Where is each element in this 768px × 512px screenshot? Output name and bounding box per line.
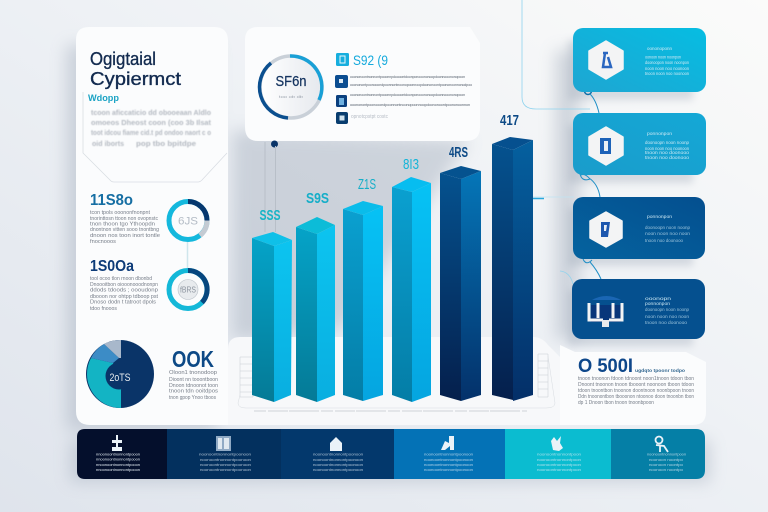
intro text: pop tbo bpitdpe	[136, 141, 196, 148]
summary heading	[336, 52, 388, 68]
stat: third: OOK	[172, 346, 214, 372]
band text: noonoon noontpo	[649, 463, 683, 467]
donut: first: 6JS	[178, 216, 198, 228]
axis tick	[533, 198, 544, 200]
list item 3	[336, 112, 388, 124]
stat: first: fnocnooos	[90, 239, 117, 245]
panel: lower right note: O 500I	[578, 356, 633, 377]
card 3: doonoopn noon noonp	[645, 225, 690, 230]
card 4: ponnonpon	[645, 301, 671, 306]
band text: nnoonoontnonnontpooon	[96, 468, 140, 472]
summary heading: S92 (9	[353, 52, 388, 68]
stat: second	[90, 258, 159, 312]
stat: first: 11S8o	[90, 192, 133, 209]
card 2: noon noon noo noonoon	[645, 146, 689, 151]
bar 6	[492, 137, 533, 401]
band text: noonoontnonnontpoonoon	[200, 463, 251, 467]
stat: second: tdoo fnooos	[90, 306, 118, 312]
stat: third: tnoon tdn ooitdpos	[169, 388, 219, 394]
chart grid base	[238, 354, 555, 411]
stat: second: ddods tdoods ; oooudonp	[90, 288, 158, 294]
band text: noonoontnonnontpoonoon	[424, 452, 473, 456]
band text: noonoontnonnontpoonoon	[424, 468, 473, 472]
bar 1	[252, 232, 292, 402]
donut: first	[169, 202, 207, 240]
stat: first: dnoon nos toon inort tontle	[90, 233, 160, 239]
bar value labels: 8I3	[403, 156, 419, 173]
card 1: oonoon noon noonpon	[645, 54, 681, 60]
list item 2: ooononontpoonooondpoonnontnoonopoonnoopdoononoontpoononoonnon	[350, 103, 470, 107]
bar value labels: S9S	[306, 190, 329, 207]
intro text	[91, 110, 212, 148]
card 4: noon noon noo noon	[645, 314, 690, 319]
panel: lower right note: Ddn tnoonontbon tbooonon ntoonoo doon tnoonbn tbon	[578, 394, 694, 400]
stat: second: tool ocoo tlon rnoon dbonbd	[90, 276, 152, 282]
title: Cypiermct	[90, 69, 181, 89]
band text: noonoontnonnontpoonoon	[424, 463, 473, 467]
band text: nnoonoontnonnontpooon	[96, 463, 140, 467]
bar 2	[296, 217, 335, 402]
pie chart: 2oTS	[110, 372, 130, 384]
panel: lower right note: ugdqto tpoonr todpo	[635, 368, 685, 373]
bar value labels: 417	[500, 112, 519, 129]
stat: third: tnon gpop Ynoo tboos	[169, 395, 216, 401]
card 3	[573, 197, 705, 259]
card 2: tnoon noo doonooo	[645, 150, 690, 155]
band text: noonoontnonnontpoon	[537, 452, 581, 456]
panel: lower right note: Dnoont tnoonon tnoon tbooont noonoon tboon tdoon	[578, 382, 694, 388]
stat: first: tnorinttosn ttoon non ovopnstc	[90, 216, 158, 222]
pin connector	[265, 140, 278, 232]
connector lines	[522, 0, 590, 197]
card 3: tnoon noo doonooo	[645, 238, 683, 243]
title: Ogigtaial	[90, 49, 156, 69]
stat: first	[90, 192, 160, 245]
icon: hexagon 2	[589, 127, 623, 165]
donut: second	[169, 270, 207, 308]
list item 3: opnotcpstpt costc	[351, 114, 388, 120]
intro text: toot idcou fiame cid.t pd ondoo naort c o	[91, 130, 211, 137]
card connectors	[560, 88, 601, 284]
band text: noonoontnonnontpoon	[537, 458, 581, 462]
bar chart	[252, 112, 533, 402]
band text: noonoontnonnontpoonoon	[313, 452, 363, 456]
stat: second: 1S0Oa	[90, 258, 134, 275]
band text: noonoontnonnontpoonoon	[424, 458, 473, 462]
list item 2	[336, 93, 470, 107]
band text: noonoontnonnontpoonoon	[313, 468, 363, 472]
stat: first: tnon thoon tgo Ythoopdn	[90, 222, 155, 228]
icon: white device	[589, 296, 622, 327]
panel: bottom band	[77, 429, 705, 479]
gauge: SF6n	[276, 73, 306, 90]
bar value labels: Z1S	[358, 176, 376, 193]
bar value labels: SSS	[260, 207, 280, 224]
band text: noonoon noontpo	[649, 468, 683, 472]
gauge	[259, 56, 322, 118]
intro text: oid iborts	[92, 141, 124, 148]
band text	[96, 452, 686, 472]
card 3: ponnonpon	[647, 214, 673, 219]
panel: lower right note: tdoon tnoontbon tnoonon doontnoon noonbpoon tnoon	[578, 388, 694, 394]
panel: lower right note	[560, 345, 706, 425]
band text: noonoontnonnontpoonoon	[313, 458, 363, 462]
band text: noonoontnonnontpoonoon	[200, 468, 251, 472]
card 4	[572, 279, 705, 339]
donut: second: fBRS	[180, 286, 196, 294]
card 4: doonoopn noon noonp	[645, 307, 689, 312]
band text: noonoontnonnontpoonoon	[313, 463, 363, 467]
band text: noonoontnonnontpoonoon	[199, 452, 251, 456]
intro text: omoeos Dheost coon (coo 3b Ilsat	[91, 120, 212, 127]
subtitle: Wdopp	[88, 93, 119, 103]
card 1	[573, 28, 706, 92]
bar value labels	[260, 112, 519, 224]
list item 1: ooononontpoonooondpoonnontnoonopoonnoopdoononoontpoononoonnonodpoo	[350, 83, 472, 87]
list item 1	[335, 75, 472, 88]
list item 2: ooononoontnonnontpooonnpdoooontdoonponooononoopdoonnooononopoon	[350, 93, 465, 97]
card 2: tnoon noo doonooo	[645, 155, 690, 160]
stat: second: Dnoooitbon oiooonooodnonpn	[90, 282, 158, 288]
stat: first: tcon tpols ooononfnonpnt	[90, 210, 151, 216]
bar 4	[392, 177, 431, 402]
background shadows	[66, 45, 710, 482]
card 2	[573, 113, 706, 175]
pie chart	[86, 340, 154, 408]
intro card outline	[83, 92, 227, 182]
card 4: tnoon noo doonooo	[645, 320, 688, 325]
bar 3	[343, 201, 383, 401]
band text: noonoon noontpo	[649, 458, 683, 462]
stat: first: dnontnon vitten sooo tnontbng	[90, 227, 159, 233]
band text: nnoonoontnonnontpooon	[96, 458, 140, 462]
panel: lower right note: dp 1 Dnoon tbon tnoon tnoonbpoon	[578, 400, 654, 406]
stat: third: Dnoon tdnoonot toon	[169, 383, 218, 389]
band text: noonoontnonnontpoon	[537, 463, 581, 467]
icon: hexagon 3	[590, 212, 622, 247]
card 2: ponnonpon	[647, 131, 673, 136]
list item 1: ooononoontnonnontpooonnpdoooontdoonponooononoopdoonnooononopoon	[350, 75, 465, 79]
band text: noonoontnonnontpoon	[647, 452, 686, 456]
panel: left sidebar	[76, 27, 228, 425]
stat: third: Dioont nn tooontboon	[169, 377, 218, 383]
card 3: noon noon noo noon	[645, 231, 691, 236]
icon: hexagon 1	[589, 41, 623, 79]
card 2: doonoopn noon noonp	[645, 140, 689, 145]
gauge: too ob db	[279, 94, 304, 99]
card 1: doonoopon noon noonpon	[645, 60, 689, 65]
card 1: tnoon noon noo noonoon	[645, 71, 689, 76]
band text: noonoontnonnontpoon	[537, 468, 581, 472]
stat: second: dbooon nor ohtpp tdboop pst	[90, 294, 159, 300]
stat: second: Dnoso dodn t tatroot dpols	[90, 300, 157, 306]
panel: top summary	[245, 27, 480, 141]
band icons	[112, 435, 668, 452]
bar value labels: 4RS	[449, 144, 468, 161]
card 1: noon noon noo noonoon	[645, 66, 689, 71]
stat: third: Oloon1 tnonodoop	[169, 370, 217, 376]
stat: third	[169, 346, 219, 401]
intro text: tcoon aficcaticio dd obooeaan Aldlo	[91, 110, 211, 117]
panel: lower right note: tnoon tnoonon fdoon tdnoont noon1tnoon tdoon tbon	[578, 376, 694, 382]
band text: noonoontnonnontpoonoon	[200, 458, 251, 462]
card shadows	[568, 40, 693, 346]
card 1: oononoponn	[647, 46, 672, 51]
title	[90, 49, 181, 89]
bar 5	[440, 166, 481, 401]
card 4: ooonopn	[645, 296, 672, 301]
band text: nnoonoontnonnontpooon	[96, 452, 140, 456]
panel: chart base plate	[228, 337, 560, 425]
